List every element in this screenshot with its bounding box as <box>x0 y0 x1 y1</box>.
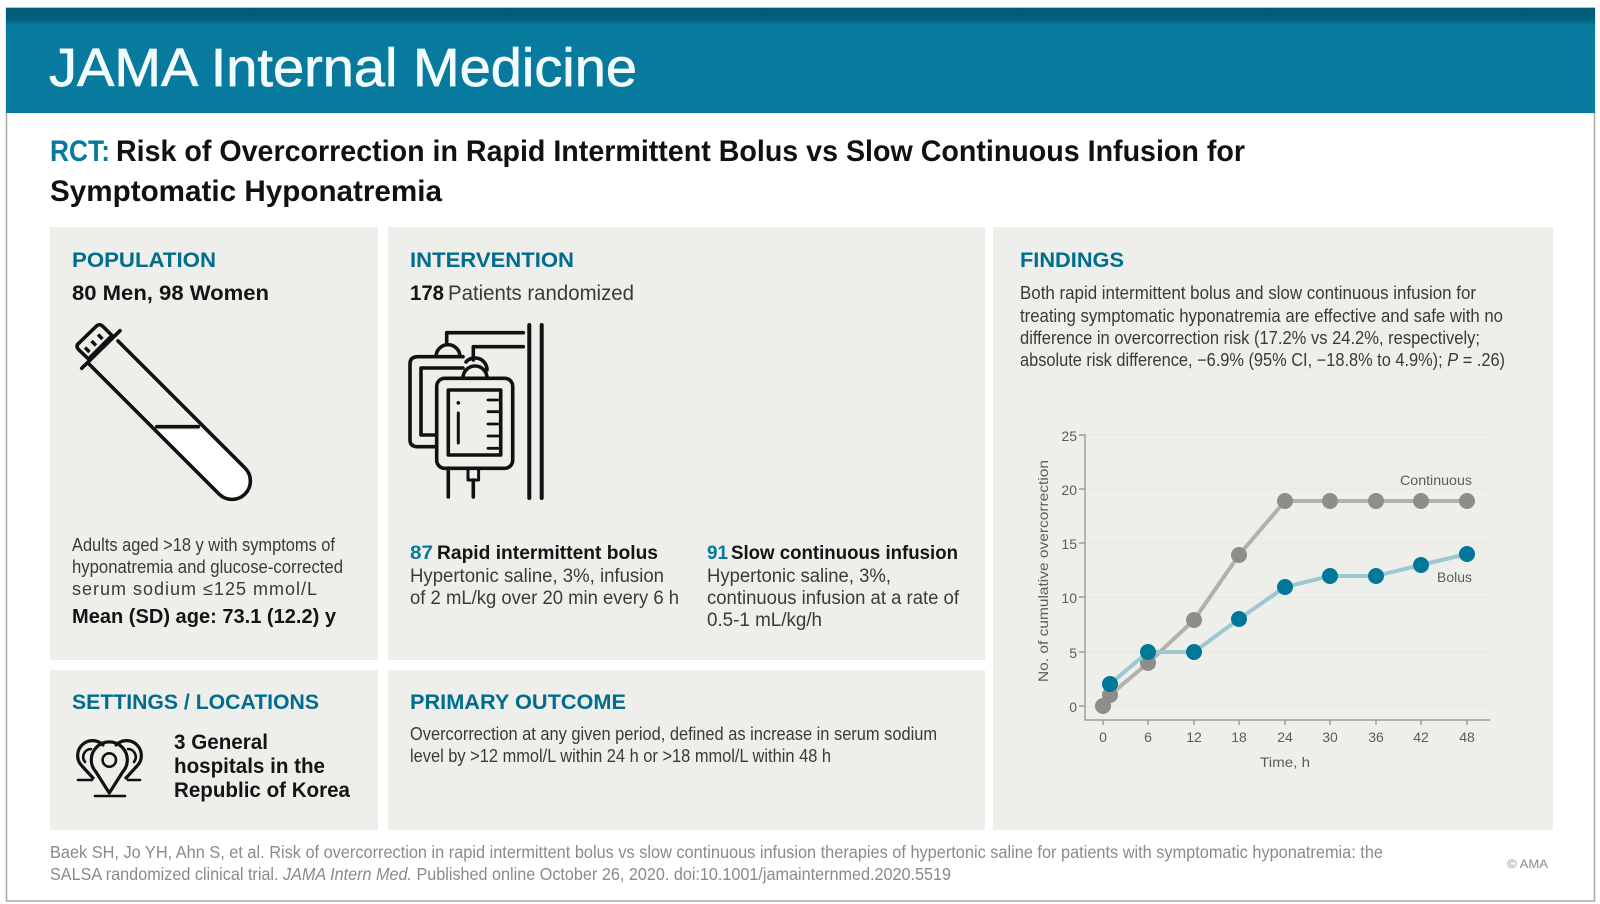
title <box>50 135 1245 208</box>
heading: primary outcome: PRIMARY OUTCOME <box>410 690 626 714</box>
title: Symptomatic Hyponatremia <box>50 175 442 208</box>
x axis tick labels: 6 <box>1144 729 1152 745</box>
population description <box>72 535 343 599</box>
arm: slow continuous infusion: 91 <box>707 542 728 564</box>
arm: slow continuous infusion: 0.5-1 mL/kg/h <box>707 610 822 631</box>
arm: slow continuous infusion <box>707 542 960 631</box>
panel: findings <box>993 227 1553 830</box>
mean age: Mean (SD) age: 73.1 (12.2) y <box>72 606 337 628</box>
heading: settings: SETTINGS / LOCATIONS <box>72 690 319 714</box>
line chart <box>1035 428 1490 770</box>
x axis tick labels: 12 <box>1186 729 1202 745</box>
icon: map pins <box>78 741 141 796</box>
x axis tick labels: 24 <box>1277 729 1293 745</box>
arm: rapid intermittent bolus: of 2 mL/kg over 20 min every 6 h <box>410 588 679 609</box>
outcome definition: level by >12 mmol/L within 24 h or >18 mmol/L within 48 h <box>410 746 831 766</box>
x axis title: Time, h <box>1260 754 1310 770</box>
patients randomized: Patients randomized <box>448 282 634 305</box>
icon: IV bags <box>410 325 542 498</box>
arm: rapid intermittent bolus: Hypertonic saline, 3%, infusion <box>410 566 664 587</box>
findings text: difference in overcorrection risk (17.2% vs 24.2%, respectively; <box>1020 328 1480 348</box>
x axis tick labels: 42 <box>1413 729 1429 745</box>
citation: SALSA randomized clinical trial. JAMA Intern Med. Published online October 26, 2020. doi:10.1001/jamainternmed.2020.5519 <box>50 864 951 884</box>
y axis tick labels: 15 <box>1061 536 1077 552</box>
patients randomized: 178 <box>410 282 444 305</box>
series label: continuous: Continuous <box>1400 472 1472 488</box>
findings text <box>1020 283 1505 370</box>
settings text: 3 General <box>174 731 268 754</box>
arm: rapid intermittent bolus: Rapid intermittent bolus <box>437 542 658 564</box>
marker: origin <box>1095 698 1111 714</box>
y axis tick labels <box>1061 428 1077 715</box>
y axis title: No. of cumulative overcorrection <box>1035 460 1051 682</box>
title: RCT: <box>50 135 110 168</box>
axes <box>1079 435 1490 725</box>
journal name: JAMA Internal Medicine <box>49 38 637 98</box>
icon: test tube <box>77 325 250 499</box>
heading: intervention: INTERVENTION <box>410 248 574 272</box>
panel: population <box>50 227 378 660</box>
heading: findings: FINDINGS <box>1020 248 1124 272</box>
y axis tick labels: 20 <box>1061 482 1077 498</box>
series label: bolus: Bolus <box>1437 569 1472 585</box>
population description: hyponatremia and glucose-corrected <box>72 557 343 577</box>
settings text: Republic of Korea <box>174 779 350 802</box>
x axis tick labels: 36 <box>1368 729 1384 745</box>
title: Risk of Overcorrection in Rapid Intermittent Bolus vs Slow Continuous Infusion for <box>116 135 1245 168</box>
y axis tick labels: 25 <box>1061 428 1077 444</box>
settings text <box>174 731 350 802</box>
y axis tick labels: 5 <box>1069 645 1077 661</box>
arm: slow continuous infusion: Slow continuous infusion <box>731 542 958 564</box>
arm: slow continuous infusion: continuous infusion at a rate of <box>707 588 960 609</box>
panel: intervention <box>388 227 985 660</box>
population description: serum sodium ≤125 mmol/L <box>72 579 317 599</box>
grid lines <box>1085 435 1490 706</box>
population count: 80 Men, 98 Women <box>72 282 269 305</box>
arm: slow continuous infusion: Hypertonic saline, 3%, <box>707 566 891 587</box>
series: bolus <box>1102 546 1475 692</box>
outcome definition: Overcorrection at any given period, defined as increase in serum sodium <box>410 724 937 744</box>
findings text: treating symptomatic hyponatremia are effective and safe with no <box>1020 306 1503 326</box>
arm: rapid intermittent bolus: 87 <box>410 542 433 564</box>
arm: rapid intermittent bolus <box>410 542 679 609</box>
y axis tick labels: 0 <box>1069 699 1077 715</box>
panel: primary outcome <box>388 670 985 830</box>
header banner <box>6 8 1595 113</box>
findings text: Both rapid intermittent bolus and slow continuous infusion for <box>1020 283 1476 303</box>
copyright: © AMA <box>1507 857 1548 871</box>
findings text: absolute risk difference, −6.9% (95% CI, −18.8% to 4.9%); P = .26) <box>1020 350 1505 370</box>
x axis tick labels <box>1099 729 1475 745</box>
citation: Baek SH, Jo YH, Ahn S, et al. Risk of overcorrection in rapid intermittent bolus vs slow continuous infusion therapies of hypertonic saline for patients with symptomatic hyponatremia: the <box>50 842 1383 862</box>
settings text: hospitals in the <box>174 755 325 778</box>
series: continuous <box>1102 493 1475 706</box>
panel: settings and locations <box>50 670 378 830</box>
x axis tick labels: 30 <box>1322 729 1338 745</box>
outcome definition <box>410 724 937 766</box>
x axis tick labels: 48 <box>1459 729 1475 745</box>
heading: population: POPULATION <box>72 248 216 272</box>
y axis tick labels: 10 <box>1061 590 1077 606</box>
population description: Adults aged >18 y with symptoms of <box>72 535 336 555</box>
citation <box>50 842 1383 884</box>
x axis tick labels: 0 <box>1099 729 1107 745</box>
x axis tick labels: 18 <box>1231 729 1247 745</box>
